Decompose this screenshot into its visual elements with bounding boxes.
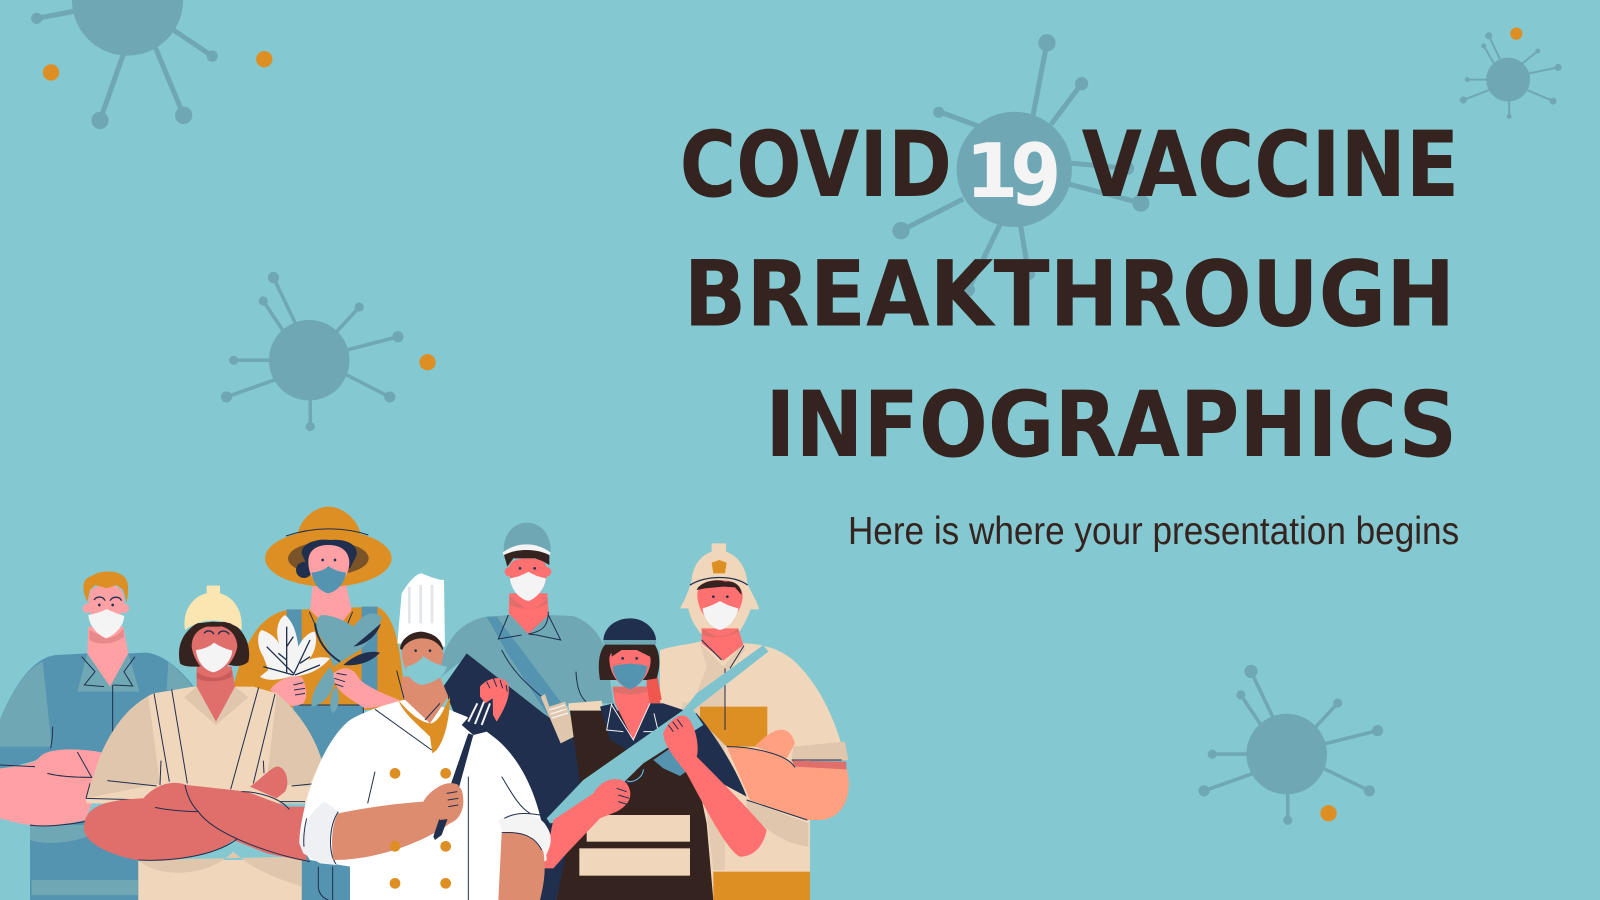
person: farmer bbox=[233, 507, 405, 900]
title: VACCINE bbox=[1082, 113, 1459, 218]
hand: farmer left bbox=[270, 676, 306, 706]
title: INFOGRAPHICS bbox=[765, 373, 1457, 478]
person: chef bbox=[299, 573, 551, 900]
person: man in blue uniform bbox=[0, 571, 197, 900]
virus: top right bbox=[1460, 33, 1561, 118]
icon: spatula bbox=[433, 698, 493, 840]
hand: farmer right bbox=[333, 668, 402, 708]
person: firefighter bbox=[660, 543, 849, 900]
illustration: group of masked workers bbox=[0, 507, 849, 900]
person: builder bbox=[84, 586, 322, 900]
virus: top left bbox=[32, 0, 217, 129]
title: 9 bbox=[1010, 126, 1061, 226]
plant: teal leaves bbox=[316, 613, 382, 667]
title: 1 bbox=[965, 128, 1018, 215]
virus: middle left bbox=[221, 272, 403, 431]
plant: white leaves bbox=[258, 615, 330, 680]
subtitle: Here is where your presentation begins bbox=[848, 510, 1459, 553]
virus: behind title bbox=[893, 35, 1149, 296]
title: COVID bbox=[680, 113, 952, 218]
person: medic with navy trousers bbox=[438, 523, 613, 900]
title bbox=[680, 113, 1459, 478]
title: BREAKTHROUGH bbox=[684, 243, 1455, 348]
virus: bottom right bbox=[1199, 665, 1383, 824]
person: soldier bbox=[543, 618, 768, 900]
